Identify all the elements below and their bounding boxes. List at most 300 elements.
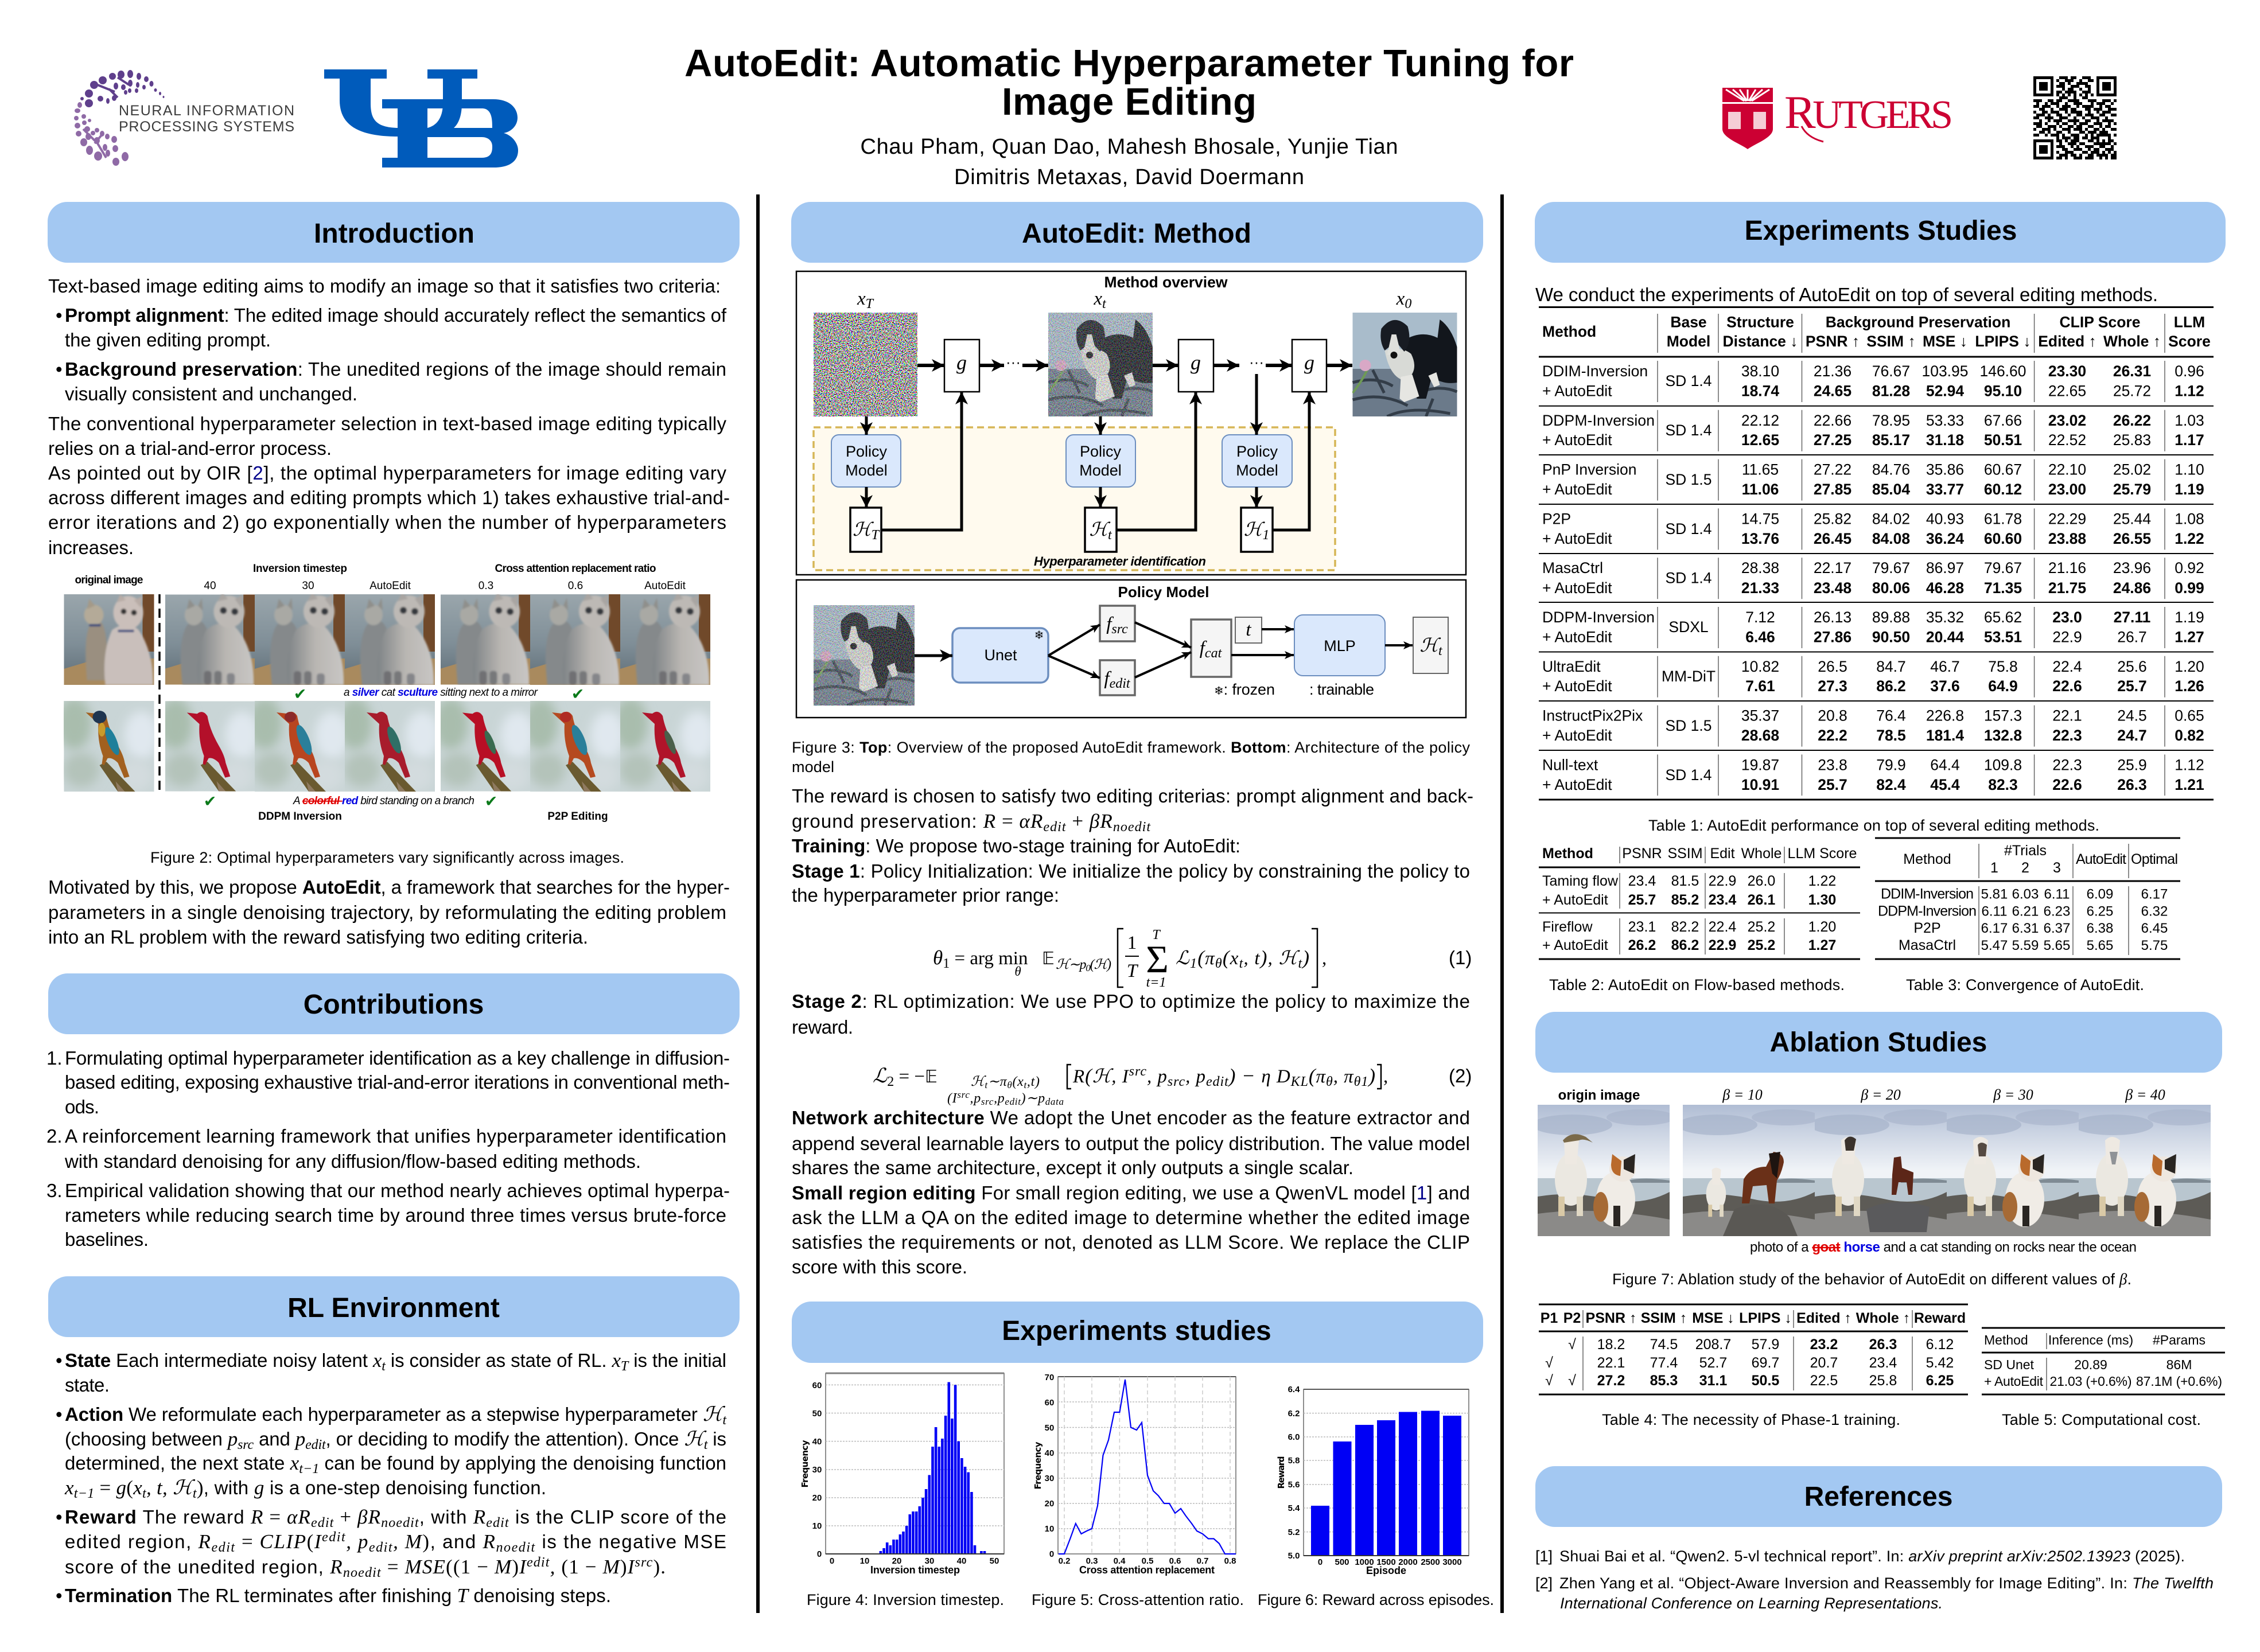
table 1 values: 23.8 bbox=[1818, 756, 1847, 773]
table 1 values: 78.95 bbox=[1872, 412, 1910, 429]
table 1 values: 22.3 bbox=[2052, 756, 2082, 773]
table 1 values: 60.12 bbox=[1984, 481, 2022, 498]
equation 2: (2) bbox=[1449, 1065, 1472, 1086]
figure 2: hyperparameter comparison images: 40 bbox=[204, 580, 216, 592]
list: state action reward termination: Termination The RL terminates after finishing T denoising steps. bbox=[65, 1584, 611, 1607]
equation 2: edit bbox=[1206, 1074, 1229, 1089]
table 4: 5.42 bbox=[1926, 1355, 1954, 1371]
table 1 values: 45.4 bbox=[1930, 776, 1960, 793]
equation 2: (I bbox=[947, 1091, 957, 1106]
table 3: Method bbox=[1903, 851, 1951, 867]
equation 2: 2 bbox=[887, 1074, 894, 1089]
table 4: 31.1 bbox=[1699, 1373, 1727, 1389]
equation 1: (1) bbox=[1449, 947, 1472, 968]
chart: cross attention line chart: 30 bbox=[1045, 1474, 1054, 1483]
figure 2: hyperparameter comparison images: 0.3 bbox=[479, 580, 493, 592]
table 1 values: 28.68 bbox=[1741, 727, 1779, 744]
table 1 header: Edited ↑ bbox=[2038, 333, 2096, 350]
prompt: goat to horse: photo of a goat horse and a cat standing on rocks near the ocean bbox=[1750, 1240, 2137, 1255]
chart: inversion timestep histogram: Frequency bbox=[800, 1440, 810, 1488]
caption: table 2: Table 2: AutoEdit on Flow-based methods. bbox=[1549, 976, 1845, 993]
list: state action reward termination: T bbox=[621, 1359, 629, 1374]
table 4: Whole ↑ bbox=[1856, 1310, 1910, 1326]
figure 2: hyperparameter comparison images: AutoEdit bbox=[644, 580, 686, 592]
table 1 values: 64.9 bbox=[1988, 677, 2018, 695]
table 3: #Trials bbox=[2004, 843, 2047, 859]
hyperparameter blocks: ℋ bbox=[853, 520, 872, 540]
table 1 values: 20.44 bbox=[1926, 629, 1964, 646]
list: state action reward termination: t bbox=[722, 1413, 727, 1428]
list: state action reward termination: t bbox=[382, 1359, 386, 1374]
table 5: 86M bbox=[2166, 1357, 2192, 1372]
list: state action reward termination: = bbox=[94, 1476, 116, 1499]
logo: Rutgers: RUTGERS bbox=[1784, 86, 1953, 138]
table 4: 52.7 bbox=[1699, 1355, 1727, 1371]
image: noise xT: x bbox=[857, 289, 866, 309]
text: reward and training: noedit bbox=[1113, 820, 1151, 835]
icon: check marks row 1 bbox=[294, 685, 584, 703]
table 1 values: 26.45 bbox=[1814, 530, 1851, 547]
table 4: 27.2 bbox=[1597, 1373, 1625, 1389]
equation 1: x bbox=[1230, 948, 1238, 969]
caption: figure 2: Figure 2: Optimal hyperparameters vary significantly across images. bbox=[150, 849, 624, 866]
list: state action reward termination: edit bbox=[211, 1540, 235, 1555]
table 1 values: 36.24 bbox=[1926, 530, 1964, 547]
table 1 values: 23.48 bbox=[1814, 579, 1851, 597]
chart: reward bar chart: 3000 bbox=[1442, 1557, 1462, 1567]
table 1 values: 35.86 bbox=[1926, 461, 1964, 478]
table 1 base models: SD 1.4 bbox=[1665, 520, 1712, 537]
table 4: Reward bbox=[1914, 1310, 1966, 1326]
image: clean dog x0 bbox=[1353, 289, 1457, 416]
table 4: 25.8 bbox=[1869, 1373, 1897, 1389]
table 3: 5.47 bbox=[1981, 938, 2008, 953]
table 1 values: 84.76 bbox=[1872, 461, 1910, 478]
heading: Introduction bbox=[48, 202, 740, 263]
caption: figure 4: Figure 4: Inversion timestep. bbox=[807, 1591, 1004, 1608]
legend: ❄: frozen bbox=[1214, 681, 1275, 698]
equation 2: src bbox=[957, 1089, 970, 1100]
image: beta 20 bbox=[1815, 1105, 1947, 1236]
table 1 values: 71.35 bbox=[1984, 579, 2022, 597]
table 1 header: Whole ↑ bbox=[2103, 333, 2161, 350]
list: state action reward termination: ), and R bbox=[422, 1530, 495, 1553]
table 4: √ bbox=[1568, 1373, 1576, 1389]
chart: cross attention line chart: 10 bbox=[1045, 1524, 1054, 1534]
table 1 values: 22.10 bbox=[2048, 461, 2086, 478]
caption: table 3: Table 3: Convergence of AutoEdit. bbox=[1906, 976, 2144, 993]
reference list: International Conference on Learning Representations. bbox=[1560, 1595, 1943, 1612]
table 2: 25.7 bbox=[1628, 892, 1656, 908]
table 1 method names bbox=[1542, 363, 1655, 793]
table 1 base models: SD 1.5 bbox=[1665, 717, 1712, 734]
table 1 values: 84.08 bbox=[1872, 530, 1910, 547]
authors: Chau Pham, Quan Dao, Mahesh Bhosale, Yunjie Tian bbox=[861, 135, 1398, 159]
chart: inversion timestep histogram: 10 bbox=[812, 1521, 822, 1531]
chart: reward bar chart: 6.4 bbox=[1288, 1385, 1300, 1394]
list: contributions: 2. bbox=[46, 1125, 63, 1147]
table 1 method names: + AutoEdit bbox=[1542, 677, 1612, 695]
table 1 values: 84.02 bbox=[1872, 510, 1910, 527]
chart: reward bar chart: 5.2 bbox=[1288, 1528, 1300, 1537]
table 4: 22.1 bbox=[1597, 1355, 1625, 1371]
table 1 values: 67.66 bbox=[1984, 412, 2022, 429]
blocks: features: t bbox=[1246, 620, 1251, 640]
table 1 values: 22.1 bbox=[2052, 707, 2082, 724]
figure 2: hyperparameter comparison images: Inversion timestep bbox=[253, 563, 347, 575]
table 1 values: 132.8 bbox=[1984, 727, 2022, 744]
table 1 header: Distance ↓ bbox=[1722, 333, 1798, 350]
table 3: Optimal bbox=[2131, 851, 2178, 867]
table 2: 26.2 bbox=[1628, 937, 1656, 953]
table 1 values: 10.82 bbox=[1741, 658, 1779, 675]
image: beta 40 bbox=[2079, 1105, 2211, 1236]
table 1 values: 22.4 bbox=[2052, 658, 2082, 675]
equation 1: π bbox=[1205, 948, 1215, 969]
heading: Experiments Studies: Experiments Studies bbox=[1745, 216, 2017, 246]
table 3: 3 bbox=[2053, 860, 2061, 876]
logo: NeurIPS bbox=[74, 70, 294, 166]
table 1 method names: DDPM-Inversion bbox=[1542, 609, 1655, 626]
logo: Rutgers bbox=[1722, 86, 1953, 149]
figure 2: hyperparameter comparison images: P2P Editing bbox=[547, 811, 608, 823]
list: state action reward termination: can be found by applying the denoising function bbox=[319, 1452, 726, 1474]
table 1 values: 26.5 bbox=[1818, 658, 1847, 675]
heading: References: References bbox=[1804, 1482, 1952, 1512]
table 1 values: 24.86 bbox=[2113, 579, 2151, 597]
list: state action reward termination: and bbox=[254, 1428, 295, 1450]
table 2: 23.4 bbox=[1628, 873, 1656, 889]
caption: figure 3: model bbox=[792, 758, 834, 776]
table 3: 5.59 bbox=[2012, 938, 2039, 953]
image: beta 30 bbox=[1947, 1105, 2079, 1236]
table 1 values: 1.27 bbox=[2175, 629, 2204, 646]
table 4 bbox=[1539, 1304, 1968, 1394]
title: AutoEdit: Automatic Hyperparameter Tuning for bbox=[684, 42, 1574, 85]
equation 1: t=1 bbox=[1146, 975, 1166, 990]
table 2: Edit bbox=[1710, 846, 1735, 862]
table 1 values: 0.99 bbox=[2175, 579, 2204, 597]
image: cat edits row bbox=[165, 592, 710, 685]
list: state action reward termination: edit bbox=[486, 1515, 509, 1530]
legend bbox=[1214, 681, 1374, 698]
table 3: AutoEdit bbox=[2076, 851, 2126, 867]
list: state action reward termination: ) bbox=[197, 1476, 203, 1499]
text: network architecture and small region editing: score with this score. bbox=[792, 1256, 967, 1277]
list: state action reward termination: is the negative MSE bbox=[536, 1531, 726, 1552]
table 4: 77.4 bbox=[1650, 1355, 1678, 1371]
table 1 method names: + AutoEdit bbox=[1542, 776, 1612, 793]
equation 1: ) bbox=[1301, 946, 1309, 969]
list: state action reward termination: state. bbox=[65, 1374, 110, 1396]
table 3: 6.32 bbox=[2141, 904, 2168, 919]
table 2 bbox=[1539, 846, 1860, 959]
text: reward and training: βR bbox=[1089, 810, 1113, 832]
table 3: 6.37 bbox=[2044, 921, 2070, 936]
heading: Contributions bbox=[48, 973, 740, 1034]
table 2: + AutoEdit bbox=[1542, 892, 1608, 908]
panel: References bbox=[1535, 1466, 2222, 1612]
table 1 values: 1.21 bbox=[2175, 776, 2204, 793]
text: motivation: Motivated by this, we propose AutoEdit, a framework that searches for the hyper- bbox=[48, 876, 730, 898]
table 1 values: 22.3 bbox=[2052, 727, 2082, 744]
list: contributions: A reinforcement learning framework that unifies hyperparameter identification bbox=[65, 1125, 726, 1147]
chart: cross attention line chart: 0.5 bbox=[1142, 1556, 1153, 1566]
icon: check marks row 1: ✔ bbox=[571, 685, 584, 703]
table 1 values: 0.96 bbox=[2175, 363, 2204, 380]
list: state action reward termination: CLIP(I bbox=[260, 1530, 321, 1553]
table 1 values: 65.62 bbox=[1984, 609, 2022, 626]
image: noisy dog xt: x bbox=[1094, 289, 1102, 309]
table 1 values: 10.91 bbox=[1741, 776, 1779, 793]
panel: Contributions bbox=[46, 973, 740, 1250]
table 5: + AutoEdit bbox=[1984, 1374, 2044, 1389]
reference list: [1] bbox=[1535, 1548, 1553, 1565]
table 1 header: LLM bbox=[2174, 313, 2205, 330]
equation 2: t bbox=[985, 1080, 988, 1090]
chart: cross attention line chart: 70 bbox=[1045, 1373, 1054, 1382]
table 3 bbox=[1875, 838, 2180, 959]
table 2: + AutoEdit bbox=[1542, 937, 1608, 953]
equation 2: ∼π bbox=[988, 1074, 1008, 1089]
table 1 base models: SD 1.4 bbox=[1665, 422, 1712, 439]
table 1 values: 7.61 bbox=[1745, 677, 1775, 695]
table 1 values: 22.9 bbox=[2052, 629, 2082, 646]
figure 7: beta comparison images: β = 30 bbox=[1993, 1086, 2033, 1103]
heading: RL Environment bbox=[48, 1276, 740, 1337]
table 1 values: 1.20 bbox=[2175, 658, 2204, 675]
table 4: 69.7 bbox=[1752, 1355, 1779, 1371]
text: reward and training bbox=[792, 785, 1473, 906]
table 1 header: LPIPS ↓ bbox=[1975, 333, 2031, 350]
image: noisy dog xt: t bbox=[1102, 297, 1107, 311]
text: intro paragraphs bbox=[48, 275, 730, 558]
chart: inversion timestep histogram: 40 bbox=[812, 1437, 822, 1447]
list: state action reward termination: Reward The reward R = αR bbox=[65, 1506, 310, 1528]
image: clean dog x0: 0 bbox=[1405, 297, 1411, 311]
list: state action reward termination bbox=[56, 1349, 727, 1607]
equation 2: ) bbox=[1367, 1065, 1375, 1087]
table 3: 6.03 bbox=[2012, 887, 2039, 902]
figure 7: beta comparison images: origin image bbox=[1558, 1088, 1640, 1103]
table 2: 1.27 bbox=[1808, 937, 1836, 953]
list: state action reward termination: edit bbox=[322, 1530, 346, 1545]
table 1 values: 1.22 bbox=[2175, 530, 2204, 547]
policy model blocks: Policy bbox=[1236, 443, 1278, 460]
table 1 values: 35.32 bbox=[1926, 609, 1964, 626]
list: state action reward termination: determined, the next state x bbox=[65, 1452, 299, 1474]
table 1 method names: InstructPix2Pix bbox=[1542, 707, 1643, 724]
equation 1: ( bbox=[1197, 946, 1205, 969]
caption: figure 3: Figure 3: Top: Overview of the proposed AutoEdit framework. Bottom: Architecture of the policy bbox=[792, 739, 1470, 756]
table 3: DDIM-Inversion bbox=[1881, 886, 1974, 902]
logo: UB bbox=[324, 69, 518, 167]
table 1 values: 22.6 bbox=[2052, 776, 2082, 793]
chart: inversion timestep histogram: 30 bbox=[812, 1465, 822, 1475]
figure 2: hyperparameter comparison images: original image bbox=[75, 574, 143, 586]
table 3: MasaCtrl bbox=[1899, 937, 1956, 953]
table 1 base models: SD 1.4 bbox=[1665, 372, 1712, 389]
heading: Experiments studies bbox=[792, 1302, 1483, 1363]
table 1 header: MSE ↓ bbox=[1923, 333, 1967, 350]
list: state action reward termination: MSE((1 − M)I bbox=[405, 1556, 526, 1578]
table 1 values: 21.75 bbox=[2048, 579, 2086, 597]
table 4: PSNR ↑ bbox=[1586, 1310, 1636, 1326]
list: state action reward termination: edit bbox=[527, 1555, 550, 1570]
text: reward and training: + bbox=[1067, 810, 1089, 832]
table 1 values: 22.52 bbox=[2048, 431, 2086, 449]
figure 2: hyperparameter comparison images: 30 bbox=[302, 580, 314, 592]
list: state action reward termination: t bbox=[704, 1437, 709, 1452]
table 1 values: 157.3 bbox=[1984, 707, 2022, 724]
chart: cross attention line chart: 60 bbox=[1045, 1398, 1054, 1408]
blocks: features: f bbox=[1200, 638, 1205, 659]
equation 2: data bbox=[1045, 1096, 1064, 1107]
image: noisy dog xt bbox=[1048, 289, 1153, 416]
caption: table 4: Table 4: The necessity of Phase-1 training. bbox=[1602, 1411, 1900, 1428]
list: state action reward termination: t bbox=[142, 1486, 147, 1501]
table 4: 18.2 bbox=[1597, 1337, 1625, 1353]
table 1 method names: DDPM-Inversion bbox=[1542, 412, 1655, 429]
arrows: policy flow bbox=[866, 374, 1309, 530]
blocks: features: edit bbox=[1110, 676, 1131, 691]
table 1 method names: UltraEdit bbox=[1542, 658, 1601, 675]
equation 1: ℒ bbox=[1176, 948, 1189, 969]
list: contributions: 1. bbox=[46, 1047, 63, 1069]
table 1 values: 46.28 bbox=[1926, 579, 1964, 597]
list: state action reward termination: t bbox=[193, 1486, 197, 1501]
dashed separator bbox=[158, 594, 161, 793]
equation 1: , t bbox=[1243, 948, 1260, 969]
table 1 values: 146.60 bbox=[1979, 363, 2026, 380]
table 2: 85.2 bbox=[1671, 892, 1699, 908]
equation 2: ℒ bbox=[873, 1065, 888, 1087]
text: intro paragraphs: Background preservation: The unedited regions of the image should remain bbox=[65, 359, 726, 380]
equation 1: ℋ∼p bbox=[1056, 957, 1086, 972]
table 4: 6.12 bbox=[1926, 1337, 1954, 1353]
list: state action reward termination: noedit bbox=[343, 1565, 382, 1580]
table 4: 50.5 bbox=[1752, 1373, 1779, 1389]
table 1 values: 79.9 bbox=[1876, 756, 1906, 773]
diagram: method overview: ··· bbox=[1249, 353, 1264, 371]
authors: Dimitris Metaxas, David Doermann bbox=[954, 165, 1304, 189]
equation 2: π bbox=[1316, 1066, 1325, 1087]
equation 1: t bbox=[1298, 956, 1302, 971]
table 1 method names: DDIM-Inversion bbox=[1542, 363, 1648, 380]
equation 2: edit bbox=[1005, 1096, 1021, 1107]
table 1 method names: + AutoEdit bbox=[1542, 579, 1612, 597]
table 3: 6.21 bbox=[2012, 904, 2039, 919]
table 3: 6.11 bbox=[2044, 887, 2070, 902]
list: state action reward termination: , p bbox=[346, 1530, 368, 1553]
image: goat and cat bbox=[1538, 1105, 1670, 1236]
diagram: method overview: Method overview bbox=[1104, 274, 1228, 291]
table 1 values: 37.6 bbox=[1930, 677, 1960, 695]
table 1 values: 25.9 bbox=[2117, 756, 2147, 773]
table 1 base models: SD 1.4 bbox=[1665, 766, 1712, 784]
chart: cross attention line chart: 0.7 bbox=[1197, 1556, 1208, 1566]
policy model blocks: Policy bbox=[846, 443, 888, 460]
caption: figure 7: Figure 7: Ablation study of the behavior of AutoEdit on different values of β. bbox=[1612, 1271, 2131, 1288]
table 2: 25.2 bbox=[1748, 919, 1775, 935]
table 2: 82.2 bbox=[1671, 919, 1699, 935]
table 1 method names: MasaCtrl bbox=[1542, 559, 1603, 576]
chart: reward bar chart: 0 bbox=[1318, 1557, 1322, 1567]
table 1 method names: + AutoEdit bbox=[1542, 629, 1612, 646]
equation 1: θ bbox=[1215, 956, 1222, 971]
table 1 values: 24.7 bbox=[2117, 727, 2147, 744]
list: state action reward termination: edit bbox=[305, 1437, 326, 1452]
table 1 values: 25.72 bbox=[2113, 382, 2151, 399]
table 1 values: 85.17 bbox=[1872, 431, 1910, 449]
chart: reward bar chart: 2000 bbox=[1398, 1557, 1418, 1567]
equation 2: )∼p bbox=[1020, 1091, 1045, 1106]
icon: check marks row 1: ✔ bbox=[294, 685, 306, 703]
table 5: 21.03 (+0.6%) bbox=[2049, 1374, 2132, 1389]
heading: Contributions: Contributions bbox=[304, 989, 484, 1020]
equation 2: θ1 bbox=[1354, 1074, 1368, 1089]
text: stage 2: Stage 2: RL optimization: We use PPO to optimize the policy to maximize the bbox=[792, 991, 1470, 1012]
table 1 values: 86.97 bbox=[1926, 559, 1964, 576]
hyperparameter identification region: Hyperparameter identification bbox=[1034, 554, 1206, 568]
text: network architecture and small region editing bbox=[792, 1107, 1470, 1277]
chart: inversion timestep histogram: 60 bbox=[812, 1381, 822, 1390]
equation 2: ,p bbox=[994, 1091, 1005, 1106]
reference list: Zhen Yang et al. “Object-Aware Inversion and Reassembly for Image Editing”. In: The Twelfth bbox=[1559, 1575, 2214, 1592]
panel: Experiments studies (column 2) bbox=[792, 1302, 1494, 1608]
table 1 values: 53.51 bbox=[1984, 629, 2022, 646]
chart: reward bar chart: 500 bbox=[1335, 1557, 1349, 1567]
list: state action reward termination: • bbox=[56, 1350, 63, 1371]
chart: cross attention line chart: Cross attention replacement bbox=[1079, 1564, 1215, 1576]
panel: Experiments Studies (column 3) bbox=[1535, 202, 2226, 993]
arrows: denoising chain bbox=[917, 364, 1352, 367]
table 1 values: 64.4 bbox=[1930, 756, 1960, 773]
chart: reward bar chart: 5.6 bbox=[1288, 1480, 1300, 1490]
table 1 values: 25.82 bbox=[1814, 510, 1851, 527]
list: state action reward termination: + bbox=[334, 1506, 357, 1528]
chart: inversion timestep histogram: 10 bbox=[860, 1556, 869, 1566]
logo: NeurIPS: NEURAL INFORMATION bbox=[119, 103, 294, 119]
equation 1: θ bbox=[1014, 964, 1021, 979]
list: state action reward termination: = bbox=[382, 1556, 404, 1578]
table 1 values: 86.2 bbox=[1876, 677, 1906, 695]
list: state action reward termination: • bbox=[56, 1404, 63, 1425]
list: state action reward termination: • bbox=[56, 1585, 63, 1606]
table 1 values: 14.75 bbox=[1741, 510, 1779, 527]
table 1 values: 22.17 bbox=[1814, 559, 1851, 576]
table 1 values: 1.19 bbox=[2175, 609, 2204, 626]
table 1 method names: + AutoEdit bbox=[1542, 530, 1612, 547]
text: stage 2: reward. bbox=[792, 1016, 853, 1038]
equation 2: src bbox=[1168, 1074, 1185, 1089]
table 1 values: 25.44 bbox=[2113, 510, 2151, 527]
equation 1: 1 bbox=[943, 956, 950, 971]
table 4: √ bbox=[1545, 1373, 1553, 1389]
table 1 values: 11.65 bbox=[1742, 461, 1779, 478]
table 1 values: 23.96 bbox=[2113, 559, 2151, 576]
block: Unet: Unet bbox=[984, 646, 1017, 664]
table 1 values: 23.00 bbox=[2048, 481, 2086, 498]
image: bird edits row bbox=[158, 698, 715, 792]
heading: Introduction: Introduction bbox=[314, 219, 474, 249]
hyperparameter blocks: ℋ bbox=[1089, 520, 1108, 540]
table 1 values: 1.12 bbox=[2175, 756, 2204, 773]
table 1 values: 181.4 bbox=[1926, 727, 1964, 744]
table 5: Method bbox=[1984, 1332, 2028, 1347]
table 1 values: 25.83 bbox=[2113, 431, 2151, 449]
list: state action reward termination: ). bbox=[653, 1556, 666, 1578]
